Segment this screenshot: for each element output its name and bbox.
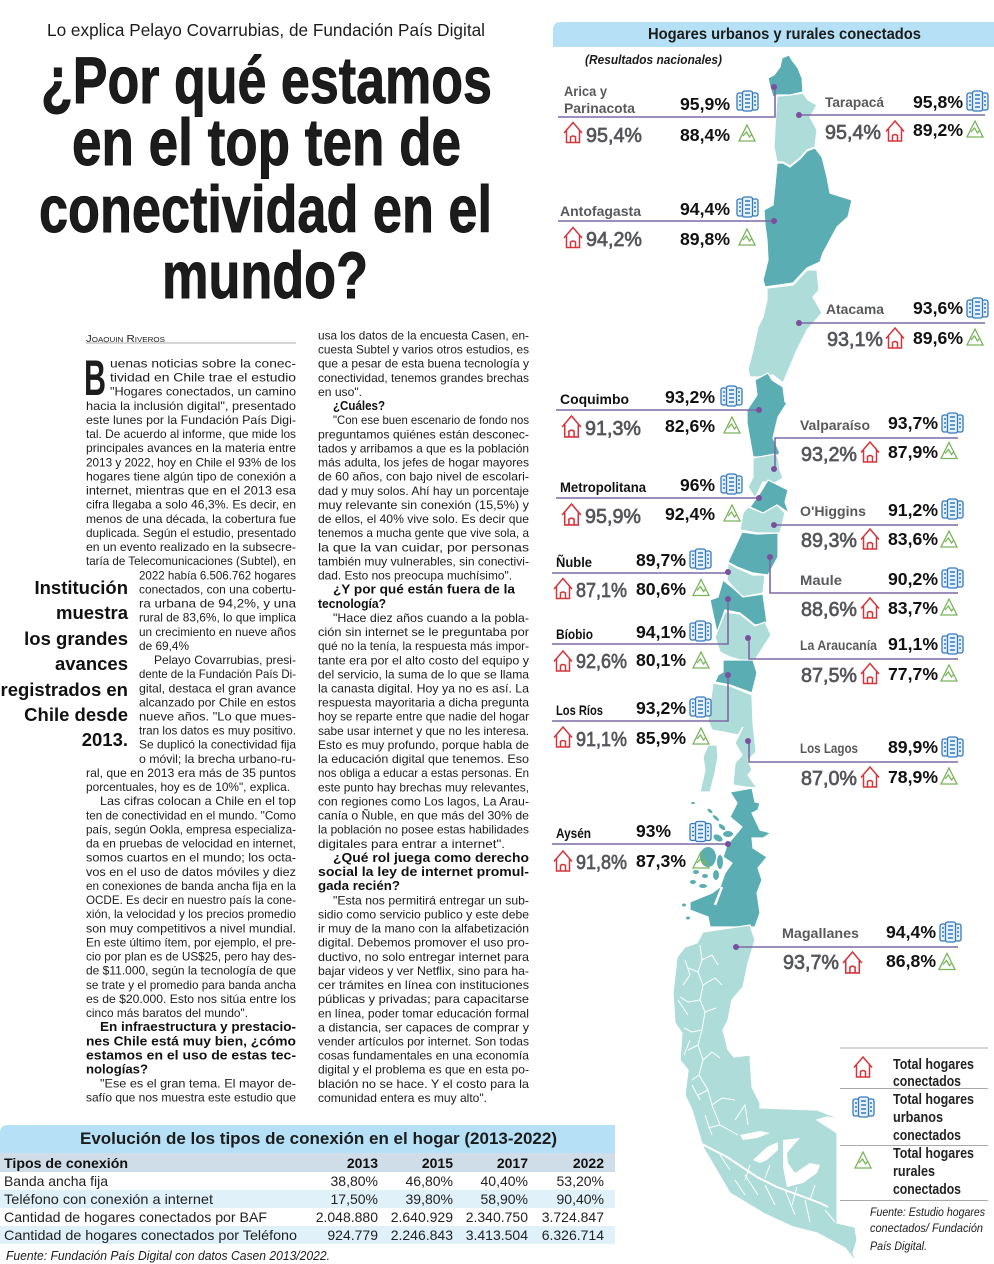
table heading xyxy=(0,1125,615,1153)
article column 1: ra urbana de 94,2%, y una xyxy=(139,596,296,610)
article column 1: es de $20.000. Esto nos sitúa entre los xyxy=(86,992,296,1006)
table header row: 2015 xyxy=(422,1155,453,1171)
article column 1: dente de la Fundación País Di- xyxy=(139,667,296,681)
region: Antofagasta xyxy=(558,197,777,251)
article column 2: tante era por el alto costo del equipo y xyxy=(318,653,529,667)
pull quote xyxy=(0,577,129,750)
region: Metropolitana: 95,9% xyxy=(585,506,641,528)
article column 2: ¿Cuáles? xyxy=(333,398,385,413)
table row: fixed broadband: 40,40% xyxy=(481,1173,528,1189)
region: Maule xyxy=(767,554,963,621)
region: Ñuble: 89,7% xyxy=(636,550,686,570)
article column 2: públicas y privadas; para capacitarse xyxy=(318,992,529,1006)
article column 1: rural de 83,6%, lo que implica xyxy=(139,611,296,625)
article column 2: sidio como servicio publico y este debe xyxy=(318,907,529,921)
region: Bíobio: 94,1% xyxy=(636,622,686,642)
region: Los Ríos: 85,9% xyxy=(636,728,686,748)
map of Chile xyxy=(673,55,857,1263)
article column 1: da en pruebas de velocidad en internet, xyxy=(86,837,296,851)
article column 2: usa los datos de la encuesta Casen, en- xyxy=(318,328,529,342)
article column 2: respuesta mayoritaria a dicha pregunta xyxy=(318,696,529,710)
region: Tarapacá: 89,2% xyxy=(913,120,963,140)
region: O'Higgins xyxy=(771,499,963,552)
region: Coquimbo: 93,2% xyxy=(665,387,715,407)
article column 1: tividad en Chile trae el estudio xyxy=(110,371,296,385)
kicker: Lo explica Pelayo Covarrubias, de Fundación País Digital xyxy=(47,20,485,40)
article column 1: tran los datos es muy positivo. xyxy=(139,724,296,738)
region: Coquimbo: 82,6% xyxy=(665,416,715,436)
byline: Joaquin Riveros xyxy=(86,334,165,345)
pull quote: avances xyxy=(55,653,128,674)
article column 2: que a pesar de esta buena tecnología y xyxy=(318,357,529,371)
article column 1: duplicada. Según el estudio, presentado xyxy=(86,526,296,540)
legend item: rural: rurales xyxy=(893,1164,935,1180)
article column 1: conectados, con una cobertu- xyxy=(139,582,296,596)
article column 2: sabe usar internet y que no les interesa. xyxy=(318,724,529,738)
article column 2: tados y arribamos a que es la población xyxy=(318,442,529,456)
article column 1: este lunes por la Fundación País Digi- xyxy=(86,413,296,427)
article column 1: tal. De acuerdo al informe, que mide los xyxy=(86,427,296,441)
legend item: urban xyxy=(853,1092,974,1144)
pull quote: los grandes xyxy=(24,628,128,649)
article column 2: ductivo, no solo entregar internet para xyxy=(318,950,529,964)
table: connection types xyxy=(0,1125,615,1244)
region: Los Lagos: 78,9% xyxy=(888,767,938,787)
region: Magallanes xyxy=(733,922,961,974)
article column 2: comunidad entera es muy alto". xyxy=(318,1091,487,1105)
article column 1: taría de Telecomunicaciones (Subtel), en xyxy=(86,554,296,568)
article column 2: blación no se hace. Y el costo para la xyxy=(318,1077,529,1091)
region: Arica y Parinacota: 95,9% xyxy=(680,94,730,114)
article column 1: En este último ítem, por ejemplo, el pre- xyxy=(86,935,296,949)
legend item: urban: urbanos xyxy=(893,1110,943,1126)
region: Atacama: 93,6% xyxy=(913,298,963,318)
region: Antofagasta: 94,4% xyxy=(680,199,730,219)
table row: phone: 39,80% xyxy=(406,1191,453,1207)
pull quote: Chile desde xyxy=(24,704,128,725)
pull quote: registrados en xyxy=(0,679,128,700)
region: Maule: Maule xyxy=(800,572,842,588)
region: Aysén: Aysén xyxy=(556,825,591,841)
title: ¿Por qué estamos xyxy=(41,43,492,117)
article column 2: dad y muy solos. Ahí hay un porcentaje xyxy=(318,484,529,498)
table row: fixed broadband: 46,80% xyxy=(406,1173,453,1189)
title: mundo? xyxy=(162,238,368,312)
region: Bíobio: 92,6% xyxy=(576,651,627,673)
region: Atacama: 89,6% xyxy=(913,328,963,348)
article column 2: cosas fundamentales en una economía xyxy=(318,1049,529,1063)
region: Maule: 88,6% xyxy=(801,599,857,621)
pull quote: Institución xyxy=(34,577,128,598)
region: Los Lagos: Los Lagos xyxy=(800,740,858,756)
region: Aysén: 93% xyxy=(636,821,671,841)
article column 2: gada recién? xyxy=(318,878,400,893)
region: Valparaíso xyxy=(771,413,963,472)
region: Valparaíso: 93,2% xyxy=(801,444,857,466)
legend item: urban: Total hogares xyxy=(893,1092,974,1108)
region: Los Ríos: 93,2% xyxy=(636,698,686,718)
table row: homes by BAF: 2.340.750 xyxy=(466,1209,528,1225)
region: Aysén: 87,3% xyxy=(636,851,686,871)
article column 1: son muy competitivos a nivel mundial. xyxy=(86,921,296,935)
article column 2: con regiones como Los lagos, La Arau- xyxy=(318,794,529,808)
map source note xyxy=(870,1205,985,1253)
article column 1: hogares tiene algún tipo de conexión a xyxy=(86,470,296,484)
article column 2: este punto hay brechas muy relevantes, xyxy=(318,780,529,794)
region: O'Higgins: 89,3% xyxy=(801,530,857,552)
article column 1: ten de conectividad en el mundo. "Como xyxy=(86,808,296,822)
article column 1 xyxy=(86,356,296,1105)
region: Metropolitana: Metropolitana xyxy=(560,479,646,495)
article column 1: nueve años. "Lo que mues- xyxy=(139,710,296,724)
title xyxy=(39,43,492,312)
region: Aysén: 91,8% xyxy=(576,852,627,874)
legend item: rural xyxy=(855,1146,974,1198)
region: Metropolitana: 92,4% xyxy=(665,504,715,524)
article column 2: canía o Ñuble, en que más del 30% de xyxy=(318,809,529,823)
table row: homes by phone xyxy=(4,1227,604,1243)
article column 2: de ellos, el 40% vive solo. Es decir que xyxy=(318,512,529,526)
article column 2: del servicio, la suma de lo que se llama xyxy=(318,667,529,681)
table row: phone: 90,40% xyxy=(557,1191,604,1207)
article column 1: menos de una década, la cobertura fue xyxy=(86,512,296,526)
article column 1: Pelayo Covarrubias, presi- xyxy=(154,653,296,667)
article column 1: Las cifras colocan a Chile en el top xyxy=(100,794,296,808)
article column 2: también muy vulnerables, sin conectivi- xyxy=(318,554,529,568)
region: Tarapacá: 95,4% xyxy=(825,122,881,144)
region: Ñuble xyxy=(552,549,731,602)
article column 1: somos cuartos en el mundo; los octa- xyxy=(86,851,296,865)
article column 1: estamos en el uso de estas tec- xyxy=(86,1047,296,1062)
region: La Araucanía: 91,1% xyxy=(888,634,938,654)
article column 2: en línea, poder tomar educación formal xyxy=(318,1006,529,1020)
table header row: 2017 xyxy=(497,1155,528,1171)
region: Arica y Parinacota: 95,4% xyxy=(586,125,642,147)
region: Tarapacá: 95,8% xyxy=(913,92,963,112)
region: O'Higgins: O'Higgins xyxy=(800,503,866,519)
region: Coquimbo: 91,3% xyxy=(585,418,641,440)
article column 1: cifra llegaba a solo 46,3%. Es decir, en xyxy=(86,498,296,512)
region: La Araucanía: La Araucanía xyxy=(800,637,877,653)
legend item: rural: conectados xyxy=(893,1182,961,1198)
region: Antofagasta: 89,8% xyxy=(680,229,730,249)
title: en el top ten de xyxy=(72,105,461,179)
article column 2: en uso". xyxy=(318,385,362,399)
article column 1: safío que nos muestra este estudio que xyxy=(86,1091,296,1105)
article column 1: Se duplicó la conectividad fija xyxy=(139,738,296,752)
region: Bíobio xyxy=(552,596,731,673)
article column 1: cinco más baratos del mundo". xyxy=(86,1006,248,1020)
article column 2: la canasta digital. Hoy ya no es así. La xyxy=(318,682,529,696)
table row: homes by phone: 2.246.843 xyxy=(391,1227,453,1243)
map source note: País Digital. xyxy=(870,1239,927,1253)
article column 1: se trate y el promedio para banda ancha xyxy=(86,978,296,992)
table row: phone: Teléfono con conexión a internet xyxy=(4,1191,213,1207)
panel: map heading band xyxy=(553,22,994,47)
region: La Araucanía: 87,5% xyxy=(801,665,857,687)
article column 2: hoy se reparte entre que nadie del hogar xyxy=(318,710,529,724)
region: Coquimbo: Coquimbo xyxy=(560,391,629,407)
region: Metropolitana: 96% xyxy=(680,475,715,495)
region: Arica y Parinacota xyxy=(558,83,777,147)
region: Los Ríos: Los Ríos xyxy=(556,702,603,718)
region: Coquimbo xyxy=(556,386,762,440)
legend item: total: conectados xyxy=(893,1074,961,1090)
map subtitle: (Resultados nacionales) xyxy=(585,53,722,67)
table header row: 2022 xyxy=(573,1155,604,1171)
article column 2: ¿Y por qué están fuera de la xyxy=(333,582,516,597)
region: Atacama xyxy=(796,298,988,351)
region: La Araucanía: 77,7% xyxy=(888,664,938,684)
region: O'Higgins: 91,2% xyxy=(888,500,938,520)
article column 1: uenas noticias sobre la conec- xyxy=(110,356,296,370)
region: Aysén xyxy=(552,821,731,874)
region: Los Lagos: 89,9% xyxy=(888,737,938,757)
article column 2: ir muy de la mano con la alfabetización xyxy=(318,922,529,936)
article column 2: digital. Debemos promover el uso pro- xyxy=(318,936,529,950)
article column 1: 2013 y 2022, hoy en Chile el 93% de los xyxy=(86,455,296,469)
article column 1: de 69,4% xyxy=(139,639,189,653)
article column 2: ción sin internet se le preguntaba por xyxy=(318,625,529,639)
table row: homes by phone: 6.326.714 xyxy=(542,1227,604,1243)
region: Valparaíso: 87,9% xyxy=(888,442,938,462)
article column 2: "Hace diez años cuando a la pobla- xyxy=(333,611,529,625)
article column 2: bajar videos y ver Netflix, sino para ha- xyxy=(318,964,529,978)
region: Antofagasta: Antofagasta xyxy=(560,203,641,219)
article column 2: de 60 años, con bajo nivel de escolari- xyxy=(318,470,529,484)
article column 1: porcentuales, hoy es de 10%", explica. xyxy=(86,780,290,794)
map source note: conectados/ Fundación xyxy=(870,1221,983,1235)
region: Magallanes: 93,7% xyxy=(783,952,839,974)
article column 1: 2022 había 6.506.762 hogares xyxy=(139,568,296,582)
region: Arica y Parinacota: Arica y xyxy=(564,83,607,99)
article column 2: tenemos a mucha gente que vive sola, a xyxy=(318,526,529,540)
article column 1: nes Chile está muy bien, ¿cómo xyxy=(86,1033,296,1048)
article column 2: la educación digital que tenemos. Eso xyxy=(318,752,529,766)
table row: homes by phone: 924.779 xyxy=(327,1227,378,1243)
region: La Araucanía xyxy=(745,634,963,687)
region: Maule: 90,2% xyxy=(888,569,938,589)
table row: homes by phone: 3.413.504 xyxy=(466,1227,528,1243)
region: Ñuble: Ñuble xyxy=(556,553,592,570)
article column 1: gital, destaca el gran avance xyxy=(139,681,296,695)
region: Valparaíso: Valparaíso xyxy=(800,417,870,433)
region: Maule: 83,7% xyxy=(888,598,938,618)
region: Atacama: Atacama xyxy=(826,301,884,317)
table row: phone xyxy=(4,1191,604,1207)
article column 1: vos en el uso de datos móviles y diez xyxy=(86,865,296,879)
region: O'Higgins: 83,6% xyxy=(888,529,938,549)
article column 1: un crecimiento en nueve años xyxy=(139,625,296,639)
article column 2: tecnología? xyxy=(318,596,386,611)
article column 1: o móvil; la brecha urbano-ru- xyxy=(139,752,296,766)
region: Valparaíso: 93,7% xyxy=(888,413,938,433)
article column 1: cio por plan es de US$25, pero hay des- xyxy=(86,950,296,964)
article column 1: principales avances en la materia entre xyxy=(86,441,296,455)
region: Los Ríos: 91,1% xyxy=(576,729,627,751)
article column 2: "Con ese buen escenario de fondo nos xyxy=(333,413,529,427)
region: Ñuble: 87,1% xyxy=(576,580,627,602)
region: Ñuble: 80,6% xyxy=(636,579,686,599)
article column 2: muy relevante sin conexión (15,5%) y xyxy=(318,498,529,512)
title: conectividad en el xyxy=(39,172,492,246)
table row: phone: 58,90% xyxy=(481,1191,528,1207)
article column 2: la que la van cuidar, por personas xyxy=(318,540,529,554)
article column 1: en un evento realizado en la subsecre- xyxy=(86,540,296,554)
region: Los Lagos xyxy=(745,737,963,790)
region: Atacama: 93,1% xyxy=(827,329,883,351)
table heading: Evolución de los tipos de conexión en el hogar (2013-2022) xyxy=(80,1129,557,1148)
table header row xyxy=(4,1155,604,1171)
article column 1: En infraestructura y prestacio- xyxy=(100,1019,296,1034)
region: Magallanes: 86,8% xyxy=(886,951,936,971)
article column 1: OCDE. Es decir en nuestro país la cone- xyxy=(86,893,296,907)
legend item: urban: conectados xyxy=(893,1128,961,1144)
table header row: 2013 xyxy=(347,1155,378,1171)
table row: homes by BAF xyxy=(4,1209,604,1225)
table source note: Fuente: Fundación País Digital con datos Casen 2013/2022. xyxy=(6,1248,330,1263)
article column 1: en conexiones de banda ancha fija en la xyxy=(86,879,296,893)
table row: homes by BAF: 2.048.880 xyxy=(316,1209,378,1225)
region: Los Lagos: 87,0% xyxy=(801,768,857,790)
table row: homes by BAF: 3.724.847 xyxy=(542,1209,604,1225)
article column 2: digitales para entrar a internet". xyxy=(318,837,505,851)
article column 2: qué no la tenía, la respuesta más impor- xyxy=(318,639,529,653)
table row: fixed broadband: 53,20% xyxy=(557,1173,604,1189)
article column 2: ¿Qué rol juega como derecho xyxy=(333,850,529,865)
pull quote: 2013. xyxy=(82,729,128,750)
region: Bíobio: Bíobio xyxy=(556,626,593,642)
legend item: total xyxy=(854,1057,974,1090)
region: Bíobio: 80,1% xyxy=(636,650,686,670)
article column 2 xyxy=(318,328,529,1105)
table row: homes by phone: Cantidad de hogares conectados por Teléfono xyxy=(4,1227,297,1243)
panel: map heading band: Hogares urbanos y rurales conectados xyxy=(648,26,921,43)
article column 2: a distancia, ser capaces de comprar y xyxy=(318,1020,529,1034)
article column 1: nologías? xyxy=(86,1062,148,1076)
article column 2: digital y el problema es que en esta po- xyxy=(318,1063,529,1077)
pull quote: muestra xyxy=(56,602,129,623)
region: Los Ríos xyxy=(552,672,731,751)
article column 2: Esto es muy profundo, porque habla de xyxy=(318,738,529,752)
article column 2: vender artículos por internet. Son todas xyxy=(318,1034,529,1048)
article column 1: "Ese es el gran tema. El mayor de- xyxy=(100,1077,296,1091)
article column 2: la población no posee estas habilidades xyxy=(318,823,529,837)
article column 1: ral, que en 2013 era más de 35 puntos xyxy=(86,766,296,780)
region: Antofagasta: 94,2% xyxy=(586,229,642,251)
table header row: Tipos de conexión xyxy=(4,1155,128,1171)
table row: fixed broadband xyxy=(4,1173,604,1189)
article column 2: más adulta, los jefes de hogar mayores xyxy=(318,456,529,470)
article column 1: "Hogares conectados, un camino xyxy=(110,385,296,399)
table row: fixed broadband: 38,80% xyxy=(331,1173,378,1189)
region: Metropolitana xyxy=(556,474,762,528)
article column 1: país, según Ookla, empresa especializa- xyxy=(86,822,296,836)
region: Magallanes: 94,4% xyxy=(886,922,936,942)
region: Arica y Parinacota: Parinacota xyxy=(564,100,635,116)
article column 2: cuesta Subtel y varios otros estudios, es xyxy=(318,343,529,357)
article column 2: cer trámites en línea con instituciones xyxy=(318,978,529,992)
legend item: total: Total hogares xyxy=(893,1057,974,1073)
article column 1: hacia la inclusión digital", presentado xyxy=(86,399,296,413)
legend item: rural: Total hogares xyxy=(893,1146,974,1162)
article column 1: xión, la velocidad y los precios promedio xyxy=(86,907,296,921)
article column 2: preguntamos quiénes están desconec- xyxy=(318,427,529,441)
legend xyxy=(840,1048,988,1201)
article column 2: nos obliga a educar a estas personas. En xyxy=(318,766,529,780)
drop cap: B xyxy=(84,350,106,406)
article column 2: dad. Esto nos preocupa muchísimo". xyxy=(318,568,512,582)
region: Magallanes: Magallanes xyxy=(782,925,859,941)
table row: phone: 17,50% xyxy=(331,1191,378,1207)
region: Arica y Parinacota: 88,4% xyxy=(680,125,730,145)
article column 1: alcanzado por Chile en estos xyxy=(139,695,296,709)
article column 1: de $11.000, según la tecnología de que xyxy=(86,964,296,978)
article column 2: "Esta nos permitirá entregar un sub- xyxy=(333,893,529,907)
region: Tarapacá: Tarapacá xyxy=(825,94,884,110)
table row: homes by BAF: 2.640.929 xyxy=(391,1209,453,1225)
article column 2: conectividad, tenemos grandes brechas xyxy=(318,371,529,385)
region: Tarapacá xyxy=(796,91,988,144)
table row: fixed broadband: Banda ancha fija xyxy=(4,1173,108,1189)
article column 1: internet, mientras que en el 2013 esa xyxy=(86,484,296,498)
article column 2: social la ley de internet promul- xyxy=(318,864,529,879)
table row: homes by BAF: Cantidad de hogares conectados por BAF xyxy=(4,1209,267,1225)
